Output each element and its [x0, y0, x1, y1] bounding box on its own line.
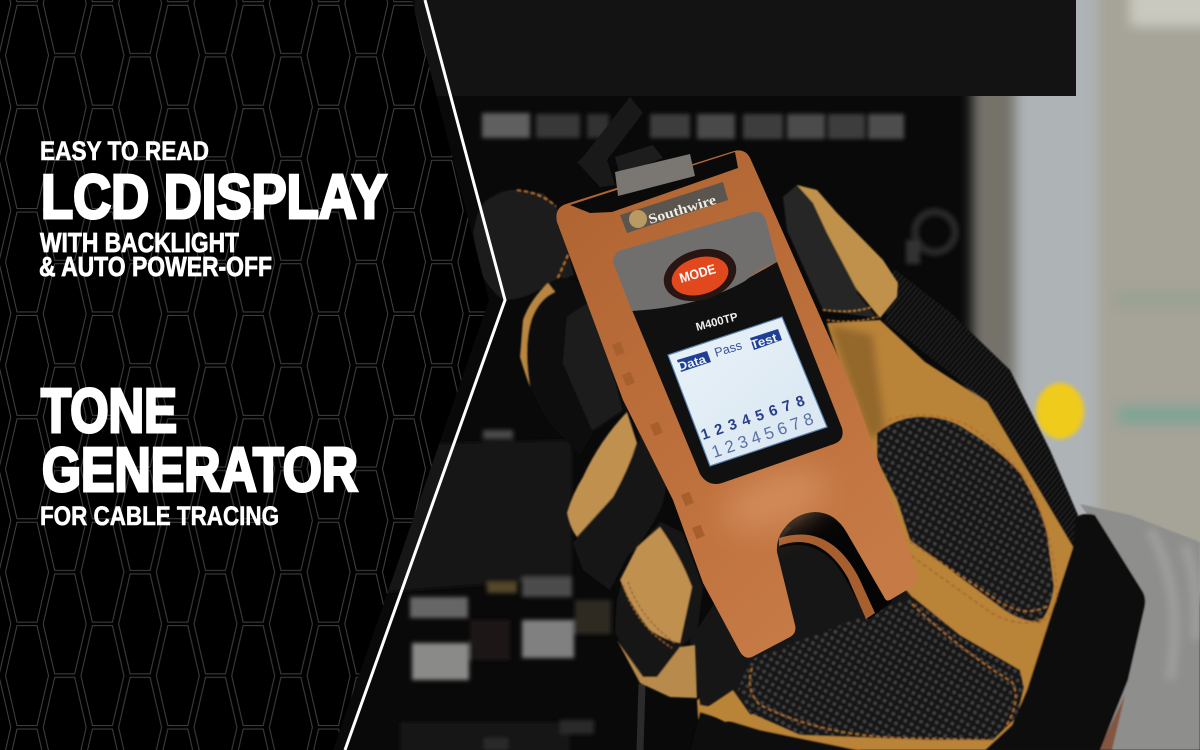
- black wrist strap: [975, 514, 1145, 750]
- black display face: [632, 262, 843, 484]
- tan lower palm strip: [703, 690, 752, 722]
- dark area under the device: [690, 520, 915, 715]
- screen menu: Data: Data: [676, 352, 708, 374]
- screen menu: Pass: Pass: [713, 338, 744, 360]
- glove: wrist, sleeve and palm: [690, 268, 1200, 750]
- hexagon pattern: [0, 0, 500, 750]
- tan palm: [697, 320, 1073, 750]
- mode button: [658, 241, 742, 309]
- upper dotted palm pad: [877, 415, 1057, 624]
- grey top plate: [613, 212, 777, 311]
- wire numbers row 1: 12345678: [699, 390, 813, 444]
- heading: LCD DISPLAY: [41, 163, 387, 232]
- cable connector flap: [577, 97, 643, 187]
- skin at wrist: [1099, 695, 1125, 750]
- detail line: FOR CABLE TRACING: [40, 501, 279, 531]
- device: cable tester: [556, 97, 918, 658]
- fourth finger: [615, 522, 703, 677]
- detail line 1: WITH BACKLIGHT: [40, 227, 239, 258]
- brand plate: [620, 182, 728, 233]
- brand plate: Southwire: [647, 193, 718, 228]
- black ribbed cuff: [885, 268, 1078, 550]
- palm shadow beside device: [830, 325, 885, 440]
- mode button: MODE: [678, 261, 717, 286]
- device body: [556, 150, 918, 658]
- model label: M400TP: [695, 311, 740, 334]
- connector port: [615, 145, 663, 175]
- yellow blurred light: [1036, 383, 1084, 439]
- body highlight: [714, 455, 836, 545]
- third finger: [567, 410, 667, 590]
- lcd screen: [668, 317, 827, 466]
- sleeve highlights: [1150, 530, 1196, 680]
- detail line 2: & AUTO POWER-OFF: [39, 251, 272, 282]
- heading line 1: TONE: [41, 377, 177, 446]
- connector grey block: [615, 154, 695, 196]
- side grips: [612, 342, 705, 539]
- feature text: tone generator: [40, 377, 358, 531]
- notch shadow: [780, 516, 892, 620]
- feature text: LCD display: [39, 136, 387, 282]
- top inset: [570, 152, 738, 213]
- upper fingertip: [473, 190, 574, 300]
- left black panel: [0, 0, 500, 750]
- white chevron line: [345, 0, 505, 750]
- grey knit sleeve: [1080, 504, 1200, 750]
- black lower strip: [690, 712, 867, 750]
- wire numbers row 2: 12345678: [709, 408, 820, 462]
- inner brown sliver: [779, 534, 875, 619]
- glove: right thumb: [783, 185, 898, 321]
- tan knuckle: [617, 640, 697, 698]
- second finger: [520, 277, 627, 455]
- screen menu: Test: Test: [749, 331, 779, 352]
- glove: left fingers: [473, 190, 752, 722]
- eyebrow: EASY TO READ: [40, 136, 209, 166]
- lower dotted palm pad: [738, 597, 1024, 740]
- data cable: [640, 684, 642, 750]
- heading line 2: GENERATOR: [42, 436, 358, 505]
